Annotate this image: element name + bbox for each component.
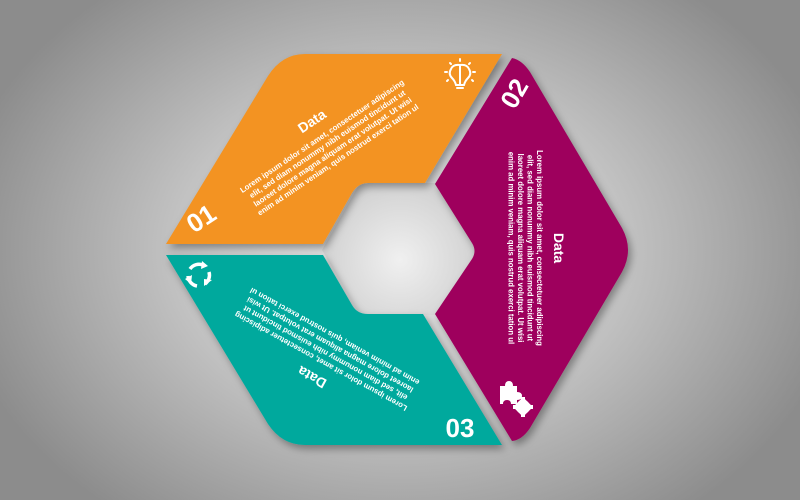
text: orange: Data	[295, 106, 329, 136]
inner hexagon	[322, 183, 478, 315]
text: teal: laoreet dolore magna aliquam erat volutpat. Ut wisi	[245, 295, 415, 394]
text: orange	[226, 59, 422, 218]
number 01: 01	[181, 198, 221, 239]
text: orange: enim ad minim veniam, quis nostrud exerci tation ul	[256, 102, 420, 217]
icon: puzzle	[500, 381, 533, 417]
panel: teal 03	[166, 255, 502, 445]
text: teal: Lorem ipsum dolor sit amet, consectetuer adipiscing	[233, 310, 409, 413]
text: magenta: enim ad minim veniam, quis nostrud exerci tation ul	[506, 152, 516, 344]
text: magenta	[506, 150, 567, 346]
text: magenta: laoreet dolore magna aliquam erat volutpat. Ut wisi	[516, 154, 525, 342]
text: orange: laoreet dolore magna aliquam erat volutpat. Ut wisi	[252, 95, 414, 209]
text: magenta: Data	[551, 233, 567, 263]
number 02: 02	[494, 73, 534, 114]
text: teal: enim ad minim veniam, quis nostrud exerci tation ul	[248, 286, 421, 387]
text: teal	[222, 285, 423, 432]
text: teal: Data	[295, 363, 329, 392]
panel: orange 01	[166, 54, 502, 244]
number 03: 03	[446, 413, 474, 443]
text: magenta: elit, sed diam nonummy nibh euismod tincidunt ut	[526, 155, 534, 342]
text: magenta: Lorem ipsum dolor sit amet, consectetuer adipiscing	[535, 150, 544, 346]
icon: cycle arrows	[185, 261, 212, 286]
text: teal: elit, sed diam nonummy nibh euismod tincidunt ut	[242, 304, 409, 402]
text: orange: elit, sed diam nonummy nibh euismod tincidunt ut	[248, 88, 408, 200]
text: orange: Lorem ipsum dolor sit amet, consectetuer adipiscing	[238, 78, 406, 195]
panel: magenta 02	[435, 58, 628, 441]
icon: brain bulb	[445, 59, 475, 88]
